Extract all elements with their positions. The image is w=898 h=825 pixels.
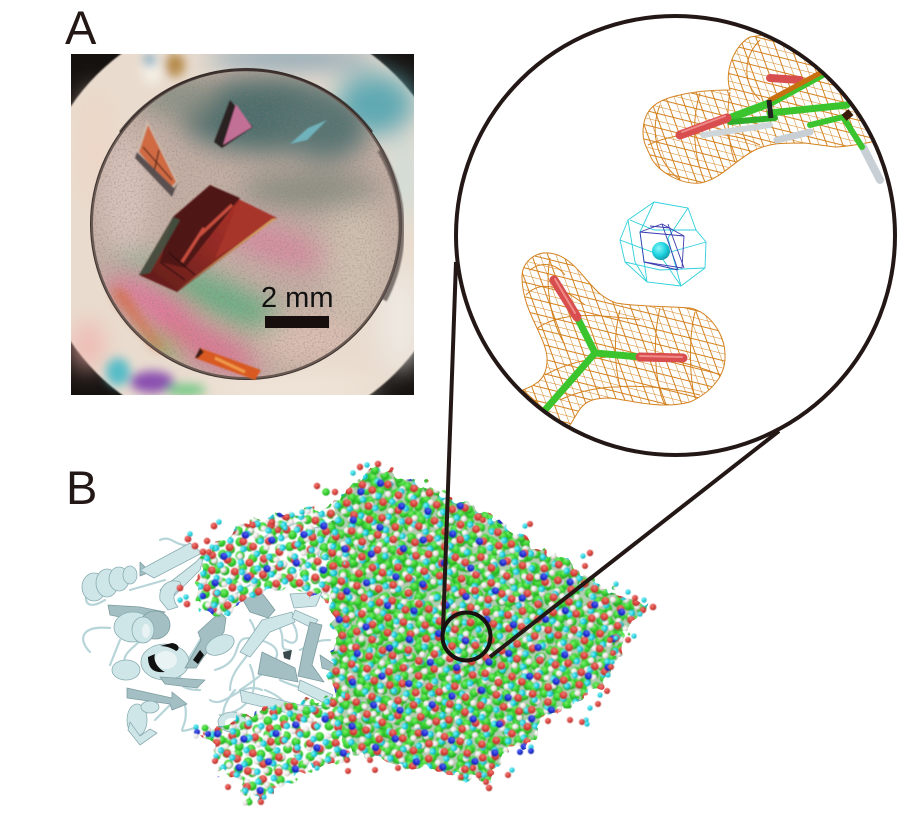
magnified view xyxy=(456,16,895,455)
helix: upper left xyxy=(82,562,150,601)
strand: left xyxy=(108,605,165,622)
scale bar label: 2 mm xyxy=(261,282,334,314)
connector line to magnified view xyxy=(490,431,779,657)
panel label: B: B xyxy=(66,461,97,514)
icon: left orange crystal xyxy=(112,285,166,352)
helix: bottom xyxy=(127,701,159,745)
scale bar xyxy=(265,316,329,328)
icon: orange crystal xyxy=(135,120,178,197)
panel B: protein ribbon xyxy=(82,510,345,745)
electron density: upper residue xyxy=(642,35,872,184)
helix: centre xyxy=(114,611,170,643)
panel B: solvent atoms, upper left cluster xyxy=(194,504,346,618)
ribbon loops xyxy=(83,510,345,731)
model: lower residue sticks xyxy=(545,279,683,410)
panel label: A: A xyxy=(65,1,97,54)
helix: big with shadow xyxy=(112,643,189,680)
model: upper residue sticks xyxy=(680,65,880,180)
panel B: solvent atoms, lower left cluster xyxy=(200,692,351,804)
magnifier outline xyxy=(456,16,895,455)
strand: lower long xyxy=(127,688,187,710)
icon: large red crystal xyxy=(139,185,277,292)
helix: arc xyxy=(160,581,182,610)
icon: pink crystal xyxy=(214,100,253,148)
panel B: stray edge atoms xyxy=(177,461,656,806)
sheet: right lower xyxy=(218,592,335,732)
panel B: solvent atoms, main cluster xyxy=(320,466,649,784)
strand: top sheet xyxy=(140,543,202,578)
metal ion density mesh and sphere xyxy=(620,202,706,286)
speckle texture xyxy=(93,72,399,377)
connector line to magnified view xyxy=(443,262,456,630)
electron density: lower residue xyxy=(522,252,726,426)
icon: cyan crystal xyxy=(290,120,327,144)
icon: bottom orange crystal xyxy=(195,348,261,380)
small selection circle xyxy=(442,612,490,660)
panel A: crystal photograph xyxy=(71,54,414,395)
helix: top xyxy=(314,527,336,559)
strand: diagonal xyxy=(185,612,226,668)
